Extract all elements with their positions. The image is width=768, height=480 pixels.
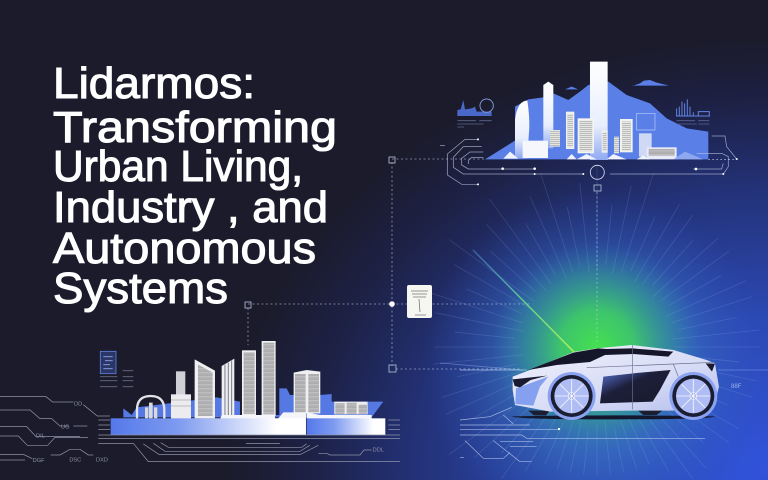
front blue panel xyxy=(515,377,548,406)
document icon xyxy=(100,351,133,387)
green glow behind car xyxy=(492,242,702,452)
front headlight xyxy=(513,376,547,387)
connector lines xyxy=(248,159,597,369)
document card icon xyxy=(407,285,432,318)
white tower xyxy=(171,371,191,419)
title: Systems xyxy=(53,264,228,313)
dashed base line xyxy=(708,158,740,160)
connector node xyxy=(389,301,395,307)
wide teal glow xyxy=(422,190,768,480)
left mini chart xyxy=(457,99,493,127)
circuit labels: DSC xyxy=(69,457,81,463)
title: Urban Living, xyxy=(53,142,303,191)
car xyxy=(512,345,719,420)
horizontal streaks beside car xyxy=(440,363,768,370)
arch xyxy=(137,396,164,419)
trace end dot xyxy=(558,428,560,430)
circuit labels: DDL xyxy=(373,447,384,453)
radiating light rays xyxy=(423,164,760,479)
white podium xyxy=(127,412,372,419)
windows xyxy=(528,348,673,370)
green laser beam xyxy=(473,250,576,354)
right mini chart xyxy=(676,99,710,124)
ring node xyxy=(590,165,604,179)
bottom city skyline xyxy=(0,341,400,464)
title: Transforming xyxy=(53,103,337,152)
circuit labels: DGF xyxy=(33,458,45,464)
small connector squares xyxy=(245,157,601,372)
blue mountain silhouette xyxy=(485,82,708,159)
door seams xyxy=(587,345,715,409)
title: Lidarmos: xyxy=(53,59,255,108)
slanted tower xyxy=(195,359,215,418)
door dark panel xyxy=(600,370,671,403)
fin lines xyxy=(225,361,232,415)
title: Autonomous xyxy=(53,224,316,273)
circuit traces under car xyxy=(460,370,705,462)
dome building xyxy=(515,101,529,158)
title: Industry , and xyxy=(53,183,328,232)
circuit labels: DD xyxy=(74,401,82,407)
thin fins tower xyxy=(222,359,234,415)
buildings xyxy=(503,82,703,159)
front wheel xyxy=(548,372,596,420)
ground shadow xyxy=(512,415,715,419)
blue back silhouette xyxy=(123,388,383,417)
trace nodes xyxy=(477,138,738,185)
tall tower b xyxy=(262,341,276,416)
top city skyline xyxy=(440,62,740,185)
tall tower a xyxy=(242,350,256,415)
circuit labels: UG xyxy=(61,425,69,431)
circuit labels xyxy=(33,401,384,464)
base right xyxy=(307,418,385,435)
car underbody xyxy=(528,409,664,415)
circuit traces right xyxy=(610,136,737,174)
low blocks xyxy=(334,402,368,414)
arch inner towers xyxy=(145,403,157,418)
twin tower block xyxy=(294,370,320,413)
base left xyxy=(111,418,306,435)
car side label: 88F xyxy=(731,384,742,390)
rear light xyxy=(706,363,715,372)
clouds xyxy=(565,80,669,89)
title xyxy=(53,59,337,313)
car body xyxy=(513,345,719,412)
tall tower xyxy=(590,62,608,160)
rear wheel xyxy=(669,372,717,420)
left circuit traces xyxy=(0,397,400,462)
circuit labels: DIL xyxy=(36,433,45,439)
circuit labels: DXD xyxy=(96,457,108,463)
circuit traces left xyxy=(440,139,583,184)
